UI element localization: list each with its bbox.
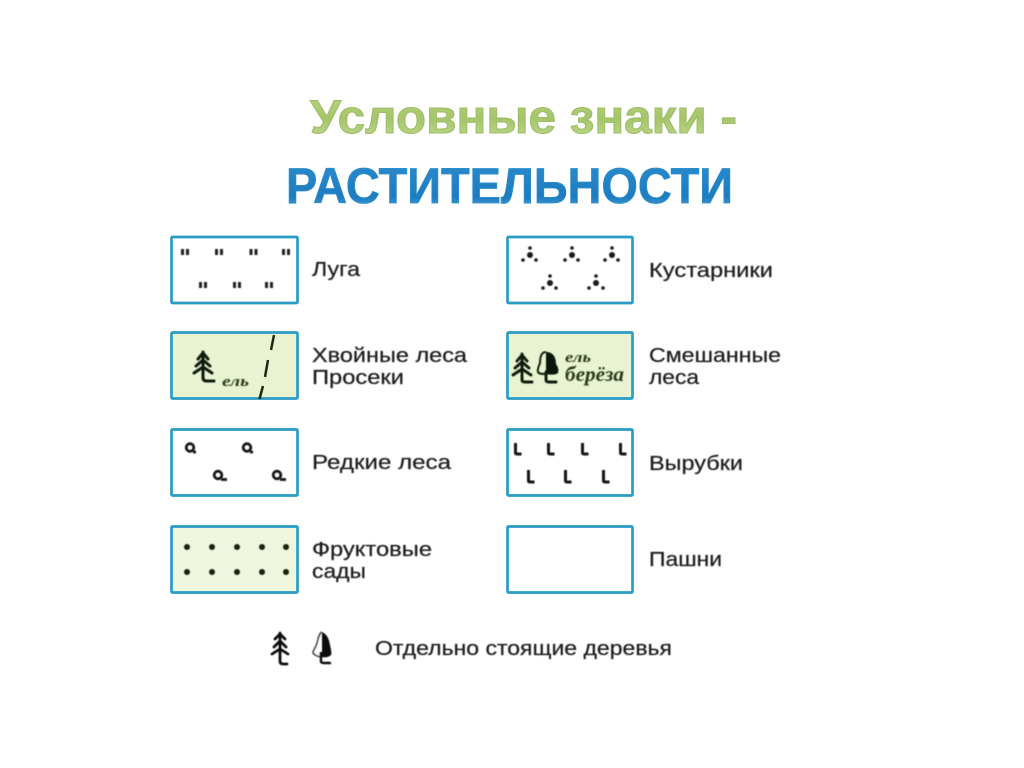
label: orchards <box>312 538 432 583</box>
text: species map labels: берёза <box>565 362 624 386</box>
icon: shrub marks <box>521 246 620 290</box>
icon: orchard dots <box>184 544 289 575</box>
label: shrubs: Кустарники <box>649 259 773 282</box>
icon: sparse forest marks <box>186 444 286 480</box>
label: coniferous forest and clearings <box>312 344 468 389</box>
icon: solitary deciduous tree <box>313 632 331 663</box>
panel: shrubs <box>508 237 773 303</box>
icon: clearing dashed line <box>260 335 274 399</box>
panel: coniferous forest <box>172 332 468 399</box>
text: fir map label: ель <box>222 374 249 390</box>
icon: fir and birch trees <box>513 352 558 382</box>
label: clear-cuts: Вырубки <box>649 452 743 475</box>
icon: solitary fir <box>272 633 288 664</box>
panel: meadows <box>172 237 361 303</box>
label: coniferous forest and clearings: Хвойные леса <box>312 344 468 367</box>
text: species map labels <box>565 350 624 386</box>
label: coniferous forest and clearings: Просеки <box>312 366 404 389</box>
label: orchards: Фруктовые <box>312 538 432 561</box>
title line 2: РАСТИТЕЛЬНОСТИ <box>286 158 733 214</box>
label: sparse forest: Редкие леса <box>312 451 452 474</box>
title line 1: Условные знаки - <box>310 90 737 143</box>
label: meadows: Луга <box>312 258 361 281</box>
icon: fir tree <box>194 352 214 381</box>
label: mixed forest <box>649 344 781 389</box>
label: orchards: сады <box>312 560 366 583</box>
label: mixed forest: Смешанные <box>649 344 781 367</box>
title <box>286 90 737 214</box>
legend: solitary trees <box>272 632 672 664</box>
panel: orchards <box>172 526 432 592</box>
label: arable land: Пашни <box>649 548 722 571</box>
panel: mixed forest <box>508 332 781 398</box>
icon: clear-cut marks <box>516 443 626 482</box>
icon: meadow marks <box>181 249 290 288</box>
label: mixed forest: леса <box>649 366 700 389</box>
text: species map labels: ель <box>565 350 591 366</box>
panel: clear-cuts <box>508 430 743 496</box>
panel: sparse forest <box>172 430 452 496</box>
panel: arable land <box>508 526 722 592</box>
label: solitary trees: Отдельно стоящие деревья <box>375 637 672 660</box>
